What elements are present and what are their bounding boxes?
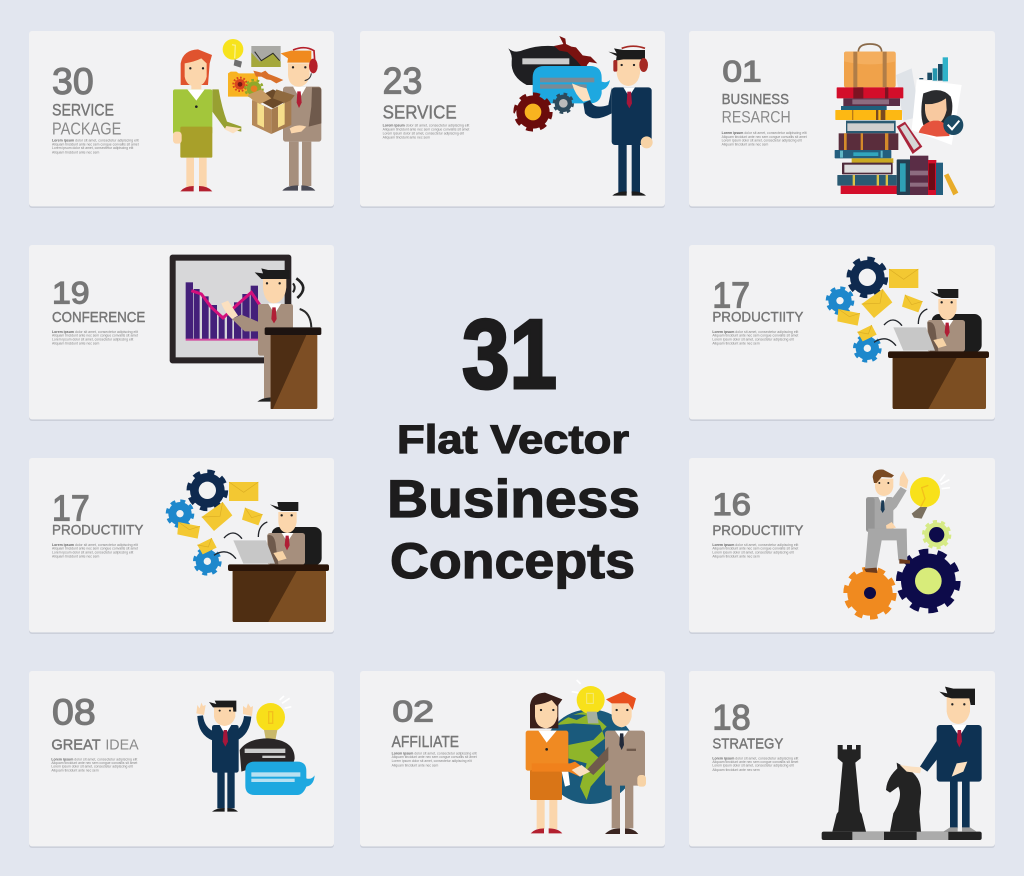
panel: great idea: [29, 671, 334, 848]
body text: Aliquam tincidunt ante nec sem congue convallis sit amet: [392, 755, 477, 759]
projection screen with chart: [170, 255, 291, 363]
icon: small green gear: [923, 521, 950, 548]
icon: bar chart: [919, 57, 948, 81]
body text: Aliquam tincidunt ante nec sem: [52, 150, 100, 154]
number 08: 08: [52, 691, 96, 732]
panel: conference: [29, 245, 334, 421]
body text: Lorem ipsum dolor sit amet, consectetur adipiscing elit: [383, 124, 469, 128]
body text: Aliquam tincidunt ante nec sem: [52, 341, 100, 345]
heading: productivity: PRODUCTIITY: [712, 309, 804, 325]
icon: orange gear: [846, 569, 894, 617]
number 17: 17: [52, 487, 90, 528]
icon: light bulb: [572, 680, 605, 723]
body text: Lorem ipsum dolor sit amet, consectetur adipiscing elit: [712, 543, 798, 547]
heading: productivity: PRODUCTIITY: [712, 522, 804, 538]
icon: yellow book: [944, 173, 958, 195]
title line: business: Business: [387, 470, 640, 529]
icon: blue gear bottom: [195, 549, 220, 574]
body text: Lorem ipsum dolor sit amet, consectetur adipiscing elit: [712, 337, 794, 341]
body text: Aliquam tincidunt ante nec sem congue convallis sit amet: [383, 128, 469, 132]
body text: Lorem ipsum dolor sit amet, consectetur adipiscing elit: [722, 139, 802, 143]
body text: [52, 330, 138, 345]
number 23: 23: [383, 61, 422, 102]
icon: navy gear: [899, 552, 957, 610]
body text: Lorem ipsum dolor sit amet, consectetur adipiscing elit: [712, 756, 798, 760]
body text: Lorem ipsum dolor sit amet, consectetur adipiscing elit: [722, 131, 807, 135]
icon: blue gear bottom: [855, 336, 880, 361]
body text: Lorem ipsum dolor sit amet, consectetur adipiscing elit: [52, 337, 133, 341]
card background: [360, 671, 665, 846]
number 17: 17: [712, 274, 750, 315]
icon: microphone: [300, 309, 311, 327]
body text: Aliquam tincidunt ante nec sem: [383, 136, 430, 140]
icon: chess rook: [832, 745, 866, 832]
number 18: 18: [712, 698, 751, 737]
icons: envelopes: [837, 269, 923, 341]
laptop: [233, 540, 275, 564]
body text: Aliquam tincidunt ante nec sem congue convallis sit amet: [52, 142, 139, 146]
illustration: productivity scene: [167, 472, 329, 622]
body text: Lorem ipsum dolor sit amet, consectetur adipiscing elit: [712, 330, 798, 334]
body text: Aliquam tincidunt ante nec sem: [392, 763, 439, 767]
body text: Lorem ipsum dolor sit amet, consectetur adipiscing elit: [52, 543, 138, 547]
body text: Lorem ipsum dolor sit amet, consectetur adipiscing elit: [51, 765, 133, 769]
body text: [51, 757, 137, 773]
body text: [383, 124, 469, 140]
body text: Lorem ipsum dolor sit amet, consectetur adipiscing elit: [52, 139, 139, 143]
body text: Lorem ipsum dolor sit amet, consectetur adipiscing elit: [712, 550, 794, 554]
icon: folder and gears: [228, 72, 263, 97]
body text: Lorem ipsum dolor sit amet, consectetur adipiscing elit: [52, 146, 133, 150]
card background: [689, 245, 995, 419]
lectern: [265, 327, 321, 409]
illustration: woman: [526, 693, 587, 833]
desk: [228, 564, 329, 622]
heading: strategy: STRATEGY: [712, 737, 784, 753]
body text: Aliquam tincidunt ante nec sem: [712, 555, 760, 559]
icon: blue speech bubble: [533, 66, 610, 103]
illustration: man cheering: [196, 701, 253, 812]
icon: light bulb: [256, 696, 291, 741]
icon: blue gear top: [167, 501, 193, 526]
card background: [689, 31, 995, 206]
arcs: [214, 522, 267, 559]
body text: Aliquam tincidunt ante nec sem: [52, 555, 100, 559]
desk: [888, 351, 989, 409]
body text: [52, 139, 139, 154]
panel: productivity left: [29, 458, 334, 634]
body text: Lorem ipsum dolor sit amet, consectetur adipiscing elit: [383, 132, 464, 136]
illustration: man: [900, 687, 982, 832]
body text: Aliquam tincidunt ante nec sem: [722, 143, 769, 147]
body text: [52, 543, 138, 559]
panel: strategy: [689, 671, 995, 848]
number 01: 01: [722, 56, 762, 89]
body text: [712, 756, 798, 772]
heading: business: BUSINESS: [722, 92, 789, 108]
icon: chess knight: [886, 763, 921, 832]
icon: dark speech bubble: [508, 46, 585, 85]
card background: [29, 31, 334, 206]
body text: [712, 330, 798, 346]
body text: Lorem ipsum dolor sit amet, consectetur adipiscing elit: [52, 550, 133, 554]
body text: Lorem ipsum dolor sit amet, consectetur adipiscing elit: [392, 759, 472, 763]
heading: great: GREAT: [51, 737, 101, 753]
illustration: man: [572, 692, 646, 834]
heading: idea: IDEA: [105, 737, 139, 753]
body text: Aliquam tincidunt ante nec sem congue convallis sit amet: [712, 547, 798, 551]
card background: [29, 458, 334, 632]
illustration: man climbing gears: [864, 470, 910, 573]
icon: light bulb: [910, 474, 950, 519]
number 16: 16: [712, 487, 751, 522]
number 31: 31: [462, 299, 557, 409]
body text: [722, 131, 807, 147]
panel: business research: [689, 31, 995, 208]
illustration: man at laptop: [927, 289, 965, 352]
icon: wrench: [554, 36, 597, 71]
body text: Aliquam tincidunt ante nec sem congue convallis sit amet: [52, 547, 138, 551]
bar chart: [186, 282, 258, 339]
number 19: 19: [52, 275, 90, 310]
card background: [360, 31, 665, 206]
chess board strip: [822, 832, 982, 840]
card background: [29, 671, 334, 846]
laptop: [893, 327, 935, 351]
icon: blue gear top: [827, 288, 853, 313]
icon: blue speech bubble: [245, 762, 315, 795]
icons: envelopes: [177, 482, 263, 554]
body text: Aliquam tincidunt ante nec sem: [712, 768, 760, 772]
panel: affiliate: [360, 671, 665, 848]
icon: dark speech bubble: [240, 738, 295, 772]
illustration: man with headset: [281, 48, 321, 191]
body text: Aliquam tincidunt ante nec sem: [712, 342, 760, 346]
icon: globe: [543, 709, 637, 804]
illustration: presenter: [221, 268, 293, 402]
heading: package: PACKAGE: [52, 118, 122, 138]
panel: service package: [29, 31, 334, 208]
body text: Aliquam tincidunt ante nec sem congue convallis sit amet: [712, 760, 798, 764]
heading: conference: CONFERENCE: [52, 310, 146, 326]
illustration: woman: [173, 49, 241, 191]
body text: Lorem ipsum dolor sit amet, consectetur adipiscing elit: [51, 757, 137, 761]
icon: briefcase: [844, 44, 896, 87]
body text: Lorem ipsum dolor sit amet, consectetur adipiscing elit: [712, 764, 794, 768]
body text: Aliquam tincidunt ante nec sem: [51, 769, 99, 773]
number 02: 02: [392, 696, 434, 729]
icon: open box: [247, 89, 306, 134]
icon: sound waves: [293, 278, 303, 298]
icon: small gear: [554, 94, 573, 113]
title line: flat vector: Flat Vector: [397, 418, 629, 462]
icon: tilted book: [897, 122, 922, 154]
heading: affiliate: AFFILIATE: [392, 734, 459, 751]
icon: dark gear: [849, 259, 886, 296]
icon: book stack: [835, 87, 903, 194]
body text: [712, 543, 798, 559]
heading: service: SERVICE: [383, 101, 457, 122]
panel: productivity gears: [689, 458, 995, 634]
heading: research: RESARCH: [722, 109, 791, 127]
heading: service: SERVICE: [52, 100, 114, 119]
panel: productivity right: [689, 245, 995, 421]
number 30: 30: [52, 61, 94, 102]
heading: productivity: PRODUCTIITY: [52, 522, 144, 538]
man at laptop: [267, 502, 305, 565]
illustration: man with headset: [572, 46, 653, 196]
icon: side books: [897, 156, 943, 195]
card background: [689, 458, 995, 632]
icon: dark gear: [189, 472, 226, 509]
icon: profile card: [912, 79, 963, 145]
icon: wrench: [253, 71, 283, 83]
card background: [689, 671, 995, 846]
icon: red gear: [515, 94, 551, 130]
chair: [932, 314, 982, 352]
body text: Aliquam tincidunt ante nec sem congue convallis sit amet: [722, 135, 807, 139]
body text: Lorem ipsum dolor sit amet, consectetur adipiscing elit: [52, 330, 138, 334]
body text: Aliquam tincidunt ante nec sem congue convallis sit amet: [52, 334, 138, 338]
icon: light bulb: [223, 39, 243, 68]
arcs: [874, 309, 927, 346]
body text: [392, 751, 477, 767]
paper sheet: [896, 68, 920, 121]
chair: [272, 527, 322, 565]
card background: [29, 245, 334, 419]
panel: service: [360, 31, 665, 208]
body text: Aliquam tincidunt ante nec sem congue convallis sit amet: [51, 761, 137, 765]
icon: chart card: [251, 46, 281, 67]
body text: Aliquam tincidunt ante nec sem congue convallis sit amet: [712, 334, 798, 338]
body text: Lorem ipsum dolor sit amet, consectetur adipiscing elit: [392, 751, 477, 755]
panel: main title: [387, 299, 640, 589]
title line: concepts: Concepts: [390, 533, 635, 589]
